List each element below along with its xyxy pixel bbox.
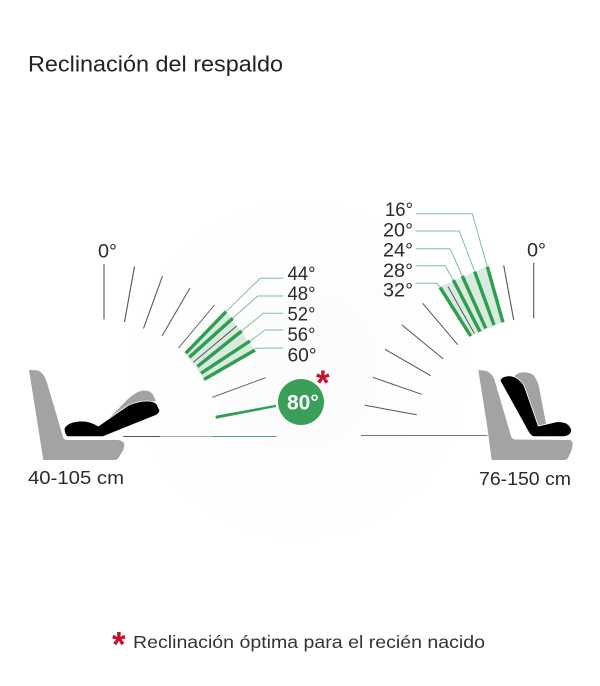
left car seat: reclined [29, 370, 160, 460]
size label: right seat: 76-150 cm [479, 468, 571, 489]
right neutral ticks [365, 263, 534, 415]
left angle labels: 48° [288, 284, 316, 305]
left angle labels: 44° [288, 264, 316, 285]
right angle labels: 28° [383, 261, 413, 282]
right angle labels: 20° [383, 221, 413, 242]
footnote asterisk: * [112, 626, 126, 664]
right angle labels: 16° [385, 200, 413, 221]
right recline wedge [440, 266, 504, 337]
right angle labels: 24° [383, 241, 413, 262]
badge: 80 degrees [278, 379, 324, 425]
footnote text: Reclinación óptima para el recién nacido [133, 632, 485, 652]
optimal recline bar [215, 405, 276, 419]
right leader lines [416, 214, 487, 287]
left angle labels: 60° [288, 346, 316, 366]
right seat cushion [500, 376, 572, 437]
size label: left seat: 40-105 cm [28, 467, 124, 488]
right angle labels: 32° [383, 281, 413, 302]
left neutral ticks [104, 264, 266, 397]
left green recline bars [186, 312, 255, 380]
footnote [112, 626, 485, 664]
left angle labels: 52° [288, 304, 316, 326]
left angle labels [98, 242, 316, 366]
left horizontal line [123, 436, 277, 438]
left angle labels: 56° [288, 325, 316, 346]
title: Reclinación del respaldo [28, 52, 283, 76]
left angle scale [104, 264, 283, 436]
right horizontal line [361, 434, 487, 436]
badge: 80 degrees: 80° [287, 392, 319, 414]
right angle labels: 0° [527, 240, 546, 262]
right seat shell [512, 372, 546, 430]
optimal asterisk: * [316, 364, 330, 403]
left seat base [29, 370, 124, 460]
left seat cushion [64, 401, 160, 437]
right green recline bars [440, 267, 503, 336]
right angle scale [361, 214, 534, 436]
left recline wedge [186, 312, 255, 380]
right seat base [478, 370, 573, 460]
left leader lines [226, 278, 283, 348]
left seat shell [108, 390, 156, 419]
right car seat: upright [478, 370, 573, 460]
left angle labels: 0° [98, 242, 117, 262]
right angle labels [383, 200, 546, 302]
